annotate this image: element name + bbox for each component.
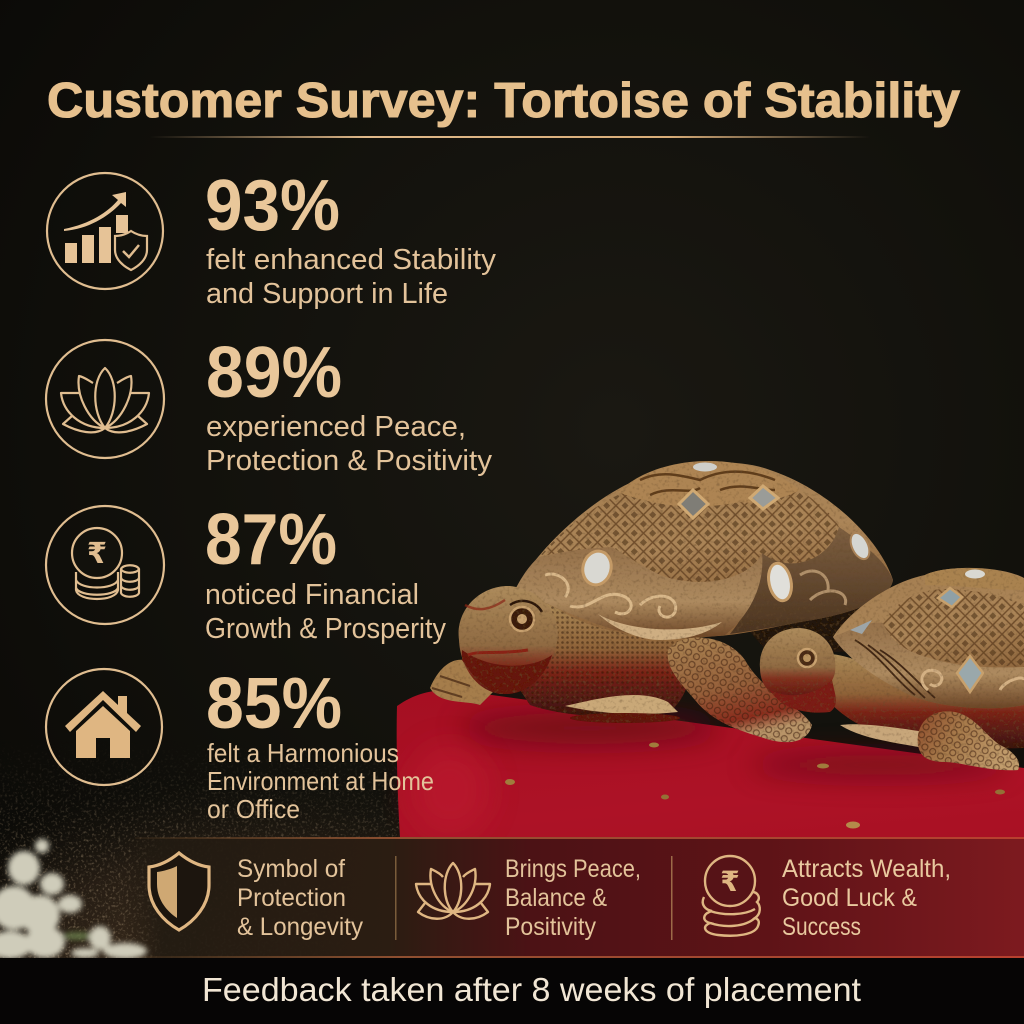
stat 4: home <box>46 664 434 824</box>
icon: coin stack <box>703 856 760 936</box>
stat value: 93% <box>205 166 340 246</box>
stat description <box>206 411 492 477</box>
large tortoise mirrors <box>579 462 873 603</box>
small tortoise <box>760 568 1024 770</box>
icon: lotus <box>416 863 490 919</box>
feature text: Symbol of <box>237 855 345 883</box>
title: Customer Survey: Tortoise of Stability <box>47 74 960 128</box>
footer bar: Feedback taken after 8 weeks of placement <box>202 971 861 1008</box>
feature: wealth <box>703 855 951 941</box>
stat value: 87% <box>205 500 337 580</box>
title rule <box>150 136 870 138</box>
feature text: & Longevity <box>237 913 363 941</box>
red cloth cushion <box>397 690 1024 960</box>
icon: lotus <box>46 340 164 458</box>
feature text: Balance & <box>505 884 607 912</box>
stat 3: financial <box>46 500 446 645</box>
stat value: 89% <box>206 333 342 413</box>
stat 2: peace <box>46 333 492 477</box>
icon: shield <box>149 853 209 930</box>
feature text: Protection <box>237 884 346 912</box>
stat description <box>205 579 446 645</box>
white flowers <box>0 839 147 959</box>
stat description: Growth & Prosperity <box>205 613 446 645</box>
feature text: Success <box>782 913 861 941</box>
divider <box>671 856 672 940</box>
icon: coin stack: ₹ <box>720 865 740 898</box>
feature text <box>505 855 641 941</box>
icon: growth chart with shield <box>47 173 163 289</box>
footer bar <box>0 958 1024 1024</box>
feature text <box>782 855 951 941</box>
stat description: experienced Peace, <box>206 411 466 443</box>
feature: peace <box>416 855 641 941</box>
large tortoise <box>430 461 893 742</box>
feature text <box>237 855 363 941</box>
feature text: Attracts Wealth, <box>782 855 951 883</box>
stat description: Protection & Positivity <box>206 445 492 477</box>
feature text: Positivity <box>505 913 596 941</box>
icon: house <box>46 669 162 785</box>
feature text: Brings Peace, <box>505 855 641 883</box>
feature text: Good Luck & <box>782 884 917 912</box>
stat 1: stability <box>47 166 497 310</box>
icon: rupee coins <box>46 506 164 624</box>
stat description: or Office <box>207 794 300 824</box>
background <box>0 167 878 958</box>
stat value: 85% <box>206 664 342 744</box>
divider <box>395 856 396 940</box>
icon: rupee coins: ₹ <box>87 536 107 570</box>
stat description: noticed Financial <box>205 579 419 611</box>
stat description: Environment at Home <box>207 766 434 796</box>
stat description <box>207 738 434 824</box>
stat description <box>206 244 497 310</box>
stat description: felt a Harmonious <box>207 738 399 768</box>
small tortoise mirrors <box>850 570 985 692</box>
stat description: and Support in Life <box>206 278 448 310</box>
stat description: felt enhanced Stability <box>206 244 497 276</box>
feature: protection <box>149 853 363 941</box>
bottom feature band background <box>0 837 1024 958</box>
